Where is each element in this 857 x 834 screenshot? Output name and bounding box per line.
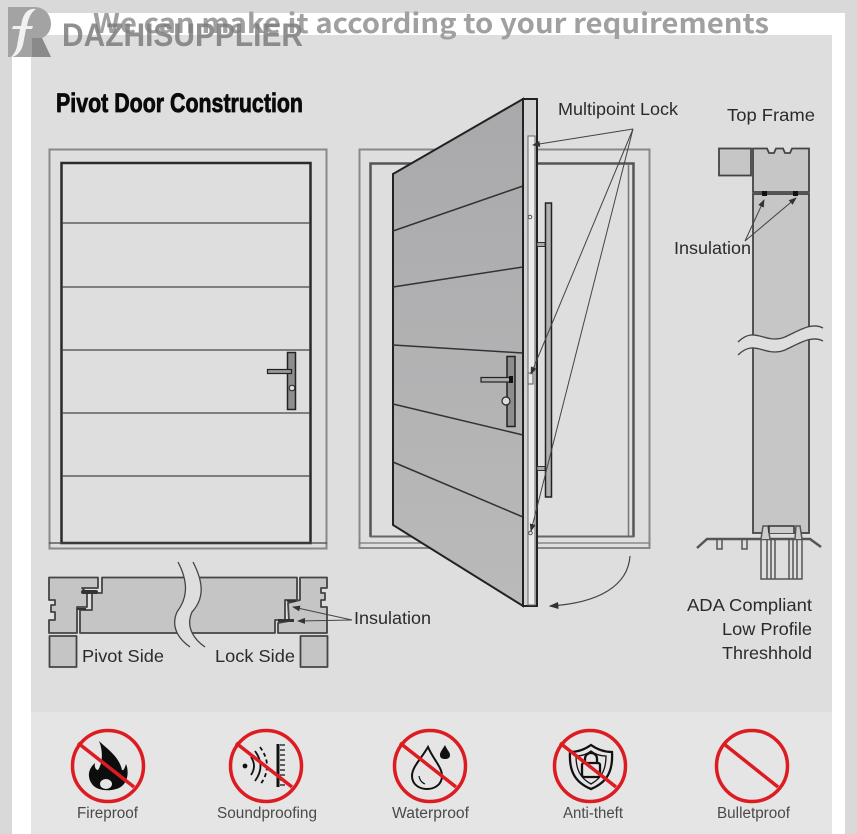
- door section upper and lower: [753, 194, 809, 533]
- icon: anti-theft: [554, 730, 626, 802]
- closed door front view: [49, 150, 327, 548]
- threshold label: ADA Compliant: [687, 595, 812, 615]
- threshold label: Low Profile: [722, 619, 812, 639]
- label: bulletproof: Bulletproof: [717, 805, 791, 822]
- threshold label: Threshhold: [722, 643, 812, 663]
- multipoint lock strip: [528, 136, 535, 605]
- wave break: [738, 326, 823, 355]
- multipoint lock leader lines: [531, 129, 633, 531]
- features panel: [31, 712, 832, 834]
- open pivot door: [393, 99, 552, 606]
- long pull handle: [537, 203, 552, 497]
- left frame block: [50, 636, 76, 667]
- door frame behind open door: [359, 150, 650, 548]
- watermark: requirements text: We can make it according to your requirements: [93, 2, 769, 41]
- main diagram panel: [31, 35, 832, 712]
- right jamb: [278, 578, 327, 633]
- threshold label: [687, 595, 812, 663]
- icon: bulletproof: [716, 730, 788, 802]
- insulation label: section: Insulation: [354, 608, 431, 628]
- door section body: [80, 578, 297, 633]
- watermark: logo: [8, 7, 51, 57]
- small frame block: [719, 148, 751, 176]
- title: Pivot Door Construction: [56, 88, 303, 118]
- label: fireproof: Fireproof: [77, 805, 139, 822]
- icon: waterproof: [394, 730, 466, 802]
- icon: fireproof: [72, 730, 144, 802]
- threshold detail: [697, 526, 821, 579]
- lock side label: Lock Side: [215, 646, 295, 666]
- right frame block: [300, 636, 328, 667]
- insulation dots: [762, 191, 767, 196]
- horizontal section: pivot and lock side: [49, 578, 328, 667]
- top frame label: Top Frame: [727, 105, 815, 125]
- multipoint lock label: Multipoint Lock: [558, 99, 678, 119]
- insulation label: top frame: Insulation: [674, 238, 751, 258]
- label: anti-theft: Anti-theft: [563, 805, 624, 822]
- watermark: brand name: DAZHISUPPLIER: [62, 17, 303, 53]
- icon: soundproofing: [230, 730, 302, 802]
- insulation leaders: section: [293, 607, 352, 621]
- closed door handle: [268, 352, 296, 410]
- label: waterproof: Waterproof: [392, 805, 470, 822]
- door edge: [523, 99, 537, 606]
- swing arrow: [550, 556, 630, 606]
- top frame block: [753, 148, 809, 192]
- door lever handle: [481, 356, 515, 426]
- pivot side label: Pivot Side: [82, 646, 164, 666]
- seals: [77, 590, 296, 622]
- left jamb: [49, 578, 98, 633]
- vertical section: [719, 148, 823, 533]
- insulation leaders: top frame: [745, 198, 796, 241]
- section break curves: [175, 562, 205, 647]
- label: soundproofing: Soundproofing: [217, 805, 317, 822]
